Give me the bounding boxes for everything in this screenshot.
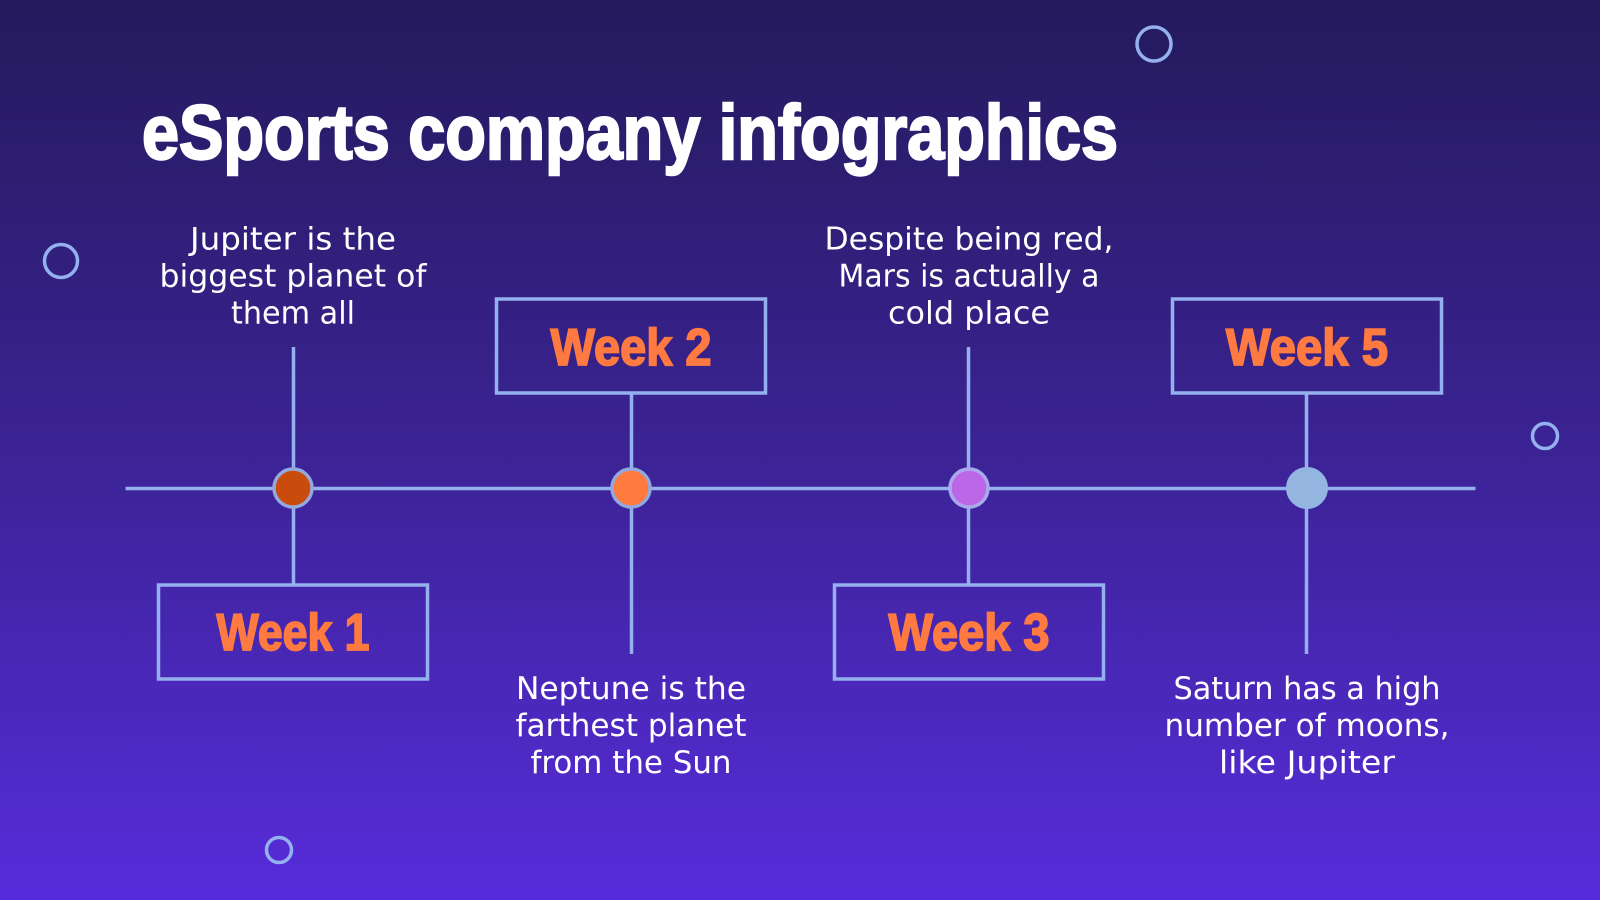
connector week 1 (292, 347, 295, 585)
node week 3 (950, 469, 988, 507)
label week 1: Week 1 (216, 604, 370, 662)
description week 1: Jupiter is the (188, 222, 396, 258)
decorative circle bottom (266, 838, 292, 862)
description week 3 (824, 222, 1114, 332)
milestone: week 5 (1164, 299, 1450, 781)
description week 5: Saturn has a high (1174, 671, 1440, 707)
node week 2 (612, 469, 650, 507)
decorative circle top right (1137, 27, 1171, 61)
description week 1: biggest planet of (160, 258, 428, 294)
description week 3: cold place (888, 296, 1050, 332)
box week 5 (1172, 299, 1442, 393)
connector week 2 (630, 393, 633, 654)
description week 5: number of moons, (1164, 708, 1450, 744)
box week 3 (834, 585, 1104, 679)
description week 1 (160, 222, 428, 332)
label week 3: Week 3 (888, 604, 1050, 662)
title: eSports company infographics (142, 90, 1118, 176)
connector week 5 (1305, 393, 1308, 654)
box week 1 (158, 585, 428, 679)
timeline axis (126, 487, 1476, 490)
milestone: week 1 (158, 222, 428, 679)
box week 2 (496, 299, 766, 393)
description week 2: from the Sun (530, 745, 732, 781)
description week 3: Mars is actually a (838, 258, 1100, 294)
description week 3: Despite being red, (824, 222, 1114, 258)
description week 5: like Jupiter (1219, 745, 1395, 781)
decorative circle right (1532, 424, 1558, 448)
label week 5: Week 5 (1226, 319, 1388, 377)
milestone: week 2 (496, 299, 766, 781)
node week 1 (274, 469, 312, 507)
description week 2: farthest planet (516, 708, 746, 744)
milestone: week 3 (824, 222, 1114, 679)
label week 2: Week 2 (550, 319, 712, 377)
connector week 3 (967, 347, 970, 585)
description week 5 (1164, 671, 1450, 781)
decorative circle left (44, 244, 78, 278)
description week 2 (516, 671, 746, 781)
description week 1: them all (231, 296, 355, 332)
node week 5 (1288, 468, 1326, 508)
description week 2: Neptune is the (516, 671, 746, 707)
